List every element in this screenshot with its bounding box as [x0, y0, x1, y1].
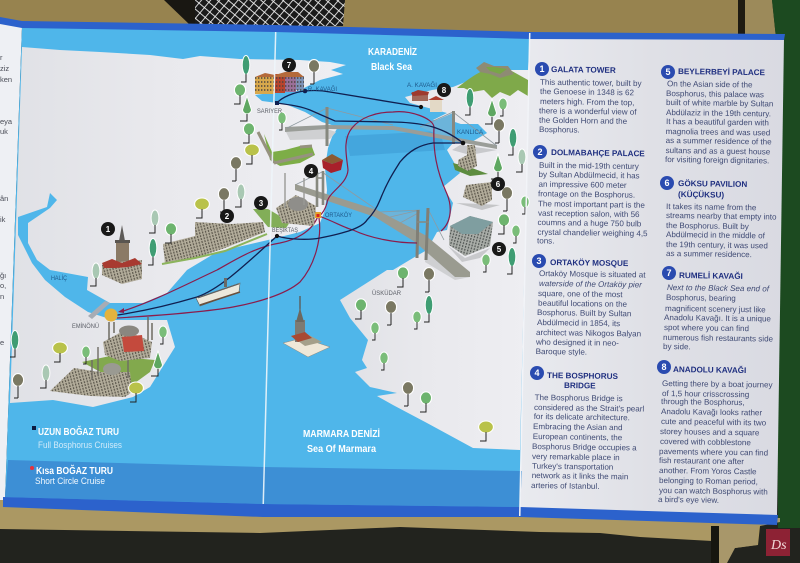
section 8: Anadolu Kavağı: Getting there by a boat journey — [662, 379, 773, 390]
trees: Asian side lower — [355, 267, 493, 441]
section 5: Beylerbeyi Palace: magnolia trees and was used — [666, 127, 770, 137]
tan strip beneath the map — [0, 495, 780, 550]
section 3: Ortaköy Mosque: ORTAKÖY MOSQUE — [550, 257, 629, 268]
Küçüksu Pavilion illustration — [456, 182, 500, 210]
trees: Asian side upper — [465, 88, 529, 274]
route stops — [275, 89, 465, 238]
place label Anadolu Kavağı: A. KAVAĞI — [407, 80, 437, 89]
legend: full cruise: UZUN BOĞAZ TURU — [38, 425, 119, 438]
map badge 5: 5 — [497, 245, 502, 254]
section 3: Ortaköy Mosque: architect was Nikogos Balyan — [536, 328, 641, 338]
Galata Bridge at Eminönü — [88, 301, 110, 319]
section 7: Rumeli Kavağı: RUMELİ KAVAĞI — [679, 269, 743, 281]
Eminönü marker — [104, 308, 118, 322]
section 1: Galata Tower: Bosphorus. — [539, 125, 580, 135]
place label Ortaköy: ORTAKÖY — [325, 211, 353, 219]
first bridge: Bosphorus Bridge — [295, 171, 470, 280]
section 2: Dolmabahçe Palace — [533, 145, 648, 246]
map badge 8 — [437, 83, 451, 97]
section 4: Bosphorus Bridge: for its delicate architecture. — [534, 412, 630, 422]
section 5: Beylerbeyi Palace — [661, 65, 773, 165]
section 8: Anadolu Kavağı: covered with cobblestone — [660, 437, 751, 447]
dark sea band at bottom — [5, 460, 522, 507]
section 7: Rumeli Kavağı: Next to the Black Sea end of — [667, 283, 770, 293]
section 5: Beylerbeyi Palace: as a summer residence of the — [666, 136, 772, 146]
place label Rumeli Kavağı: R. KAVAĞI — [308, 84, 337, 93]
section 1: Galata Tower: the Golden Horn and the — [539, 116, 628, 126]
dark shadow below net — [164, 0, 196, 25]
section 6: Göksu Pavilion: GÖKSU PAVILION — [678, 178, 747, 189]
section 4: Bosphorus Bridge: Turkey's transportation — [532, 462, 613, 472]
bottom blue stripe — [3, 497, 778, 525]
section 8: Anadolu Kavağı: fish restaurant one after — [659, 456, 744, 466]
section 8: Anadolu Kavağı: a bird's eye view. — [658, 495, 719, 505]
section 3: Ortaköy Mosque: who designed it in neo- — [535, 338, 619, 348]
sea label Sea of Marmara: Sea Of Marmara — [307, 443, 376, 455]
seat top surface — [0, 0, 740, 40]
section 5: Beylerbeyi Palace: Bosphorus, this palace was — [666, 89, 764, 99]
map badge 4: 4 — [309, 167, 314, 176]
left folded flap: ik — [0, 215, 6, 224]
section 8: Anadolu Kavağı: you can watch Bosphorus with — [659, 486, 768, 497]
place label Beşiktaş: BEŞİKTAŞ — [272, 225, 298, 234]
section 1: Galata Tower: the Genoese in 1348 is 62 — [540, 87, 635, 97]
map badge 7 — [282, 58, 296, 72]
left folded flap: n — [0, 292, 4, 301]
place label Eminönü: EMİNÖNÜ — [72, 321, 99, 330]
land: European side with Golden Horn — [10, 47, 346, 407]
section 6: Göksu Pavilion: (KÜÇÜKSU) — [678, 189, 724, 200]
map panel — [5, 26, 530, 509]
section 3: Ortaköy Mosque: Abdülmecid in 1854, its — [537, 318, 620, 328]
section 2: Dolmabahçe Palace: tons. — [537, 236, 555, 246]
Beylerbeyi Palace illustration — [448, 216, 493, 262]
legend: full cruise — [32, 425, 122, 451]
section 7: Rumeli Kavağı: spot where you can find — [664, 323, 749, 333]
section 1: Galata Tower: there is a wonderful view of — [539, 106, 637, 117]
legend: full cruise: Full Bosphorus Cruises — [38, 440, 122, 451]
section 3: Ortaköy Mosque: Bosphorus. Built by Sultan — [537, 308, 631, 318]
section 3: Ortaköy Mosque: square, one of the most — [538, 289, 623, 299]
map badge 2 — [220, 209, 234, 223]
section 7: Rumeli Kavağı: 7 — [666, 268, 672, 278]
full cruise routes (navy) — [111, 91, 463, 316]
section 1: Galata Tower: GALATA TOWER — [551, 65, 616, 75]
sea label Black Sea — [368, 45, 417, 73]
Yoros Castle hill illustration — [457, 62, 528, 98]
section 5: Beylerbeyi Palace: sultans and as a guest house — [666, 146, 771, 156]
watermark badge — [766, 529, 790, 556]
section 8: Anadolu Kavağı — [657, 360, 773, 505]
section 6: Göksu Pavilion: the 19th century, it was used — [666, 240, 768, 250]
Anadolu Hisarı tower illustration — [453, 145, 488, 176]
section 4: Bosphorus Bridge: Bosphorus Bridge occupies a — [532, 442, 637, 452]
section 3: Ortaköy Mosque: Baroque style. — [536, 347, 587, 357]
red pavilion illustration — [322, 154, 343, 173]
section 2: Dolmabahçe Palace: frontage on the Bosphorus. — [538, 189, 635, 200]
section 2: Dolmabahçe Palace: coumns and a huge 750 bulb — [537, 218, 642, 228]
section 8: Anadolu Kavağı: storey houses and a square — [660, 427, 760, 437]
section 2: Dolmabahçe Palace: The most important part is the — [538, 199, 646, 210]
Kanlıca inlet — [445, 124, 487, 138]
section 1: Galata Tower: meters high. From the top, — [540, 97, 634, 107]
left folded flap: r — [0, 53, 3, 62]
section 8: Anadolu Kavağı: cute and peaceful with its two — [661, 417, 767, 427]
sea label Black Sea: KARADENİZ — [368, 45, 417, 58]
place label Sarıyer: SARIYER — [257, 108, 282, 115]
land: Asian side — [340, 37, 530, 450]
Dolmabahçe Palace illustration — [162, 222, 267, 264]
left folded flap: ken — [0, 75, 12, 84]
sea label Black Sea: Black Sea — [371, 61, 412, 73]
section 8: Anadolu Kavağı: belonging to Roman period, — [659, 476, 758, 486]
Sarıyer houses illustration — [255, 72, 304, 94]
map badge 8: 8 — [442, 86, 447, 95]
map badge 5 — [492, 242, 506, 256]
section 2: Dolmabahçe Palace: crystal chandelier weighing 4,5 — [537, 228, 648, 238]
Blue Mosque complex illustration — [50, 347, 155, 397]
section 1: Galata Tower: 1 — [539, 64, 545, 74]
section 1: Galata Tower: This authentic tower, built by — [540, 78, 642, 88]
section 6: Göksu Pavilion: the Bosphorus. Built by — [666, 221, 749, 231]
section 2: Dolmabahçe Palace: Built in the mid-19th century — [539, 161, 639, 171]
section 5: Beylerbeyi Palace: BEYLERBEYİ PALACE — [678, 66, 766, 77]
Galata Tower illustration — [102, 225, 142, 284]
place label Kanlıca: KANLICA — [457, 129, 484, 136]
map badge 3 — [254, 196, 268, 210]
section 4: Bosphorus Bridge: BRIDGE — [564, 381, 596, 390]
legend: short cruise — [30, 464, 113, 487]
section 1: Galata Tower — [535, 62, 642, 135]
place label Üsküdar: ÜSKÜDAR — [372, 289, 401, 297]
section 8: Anadolu Kavağı: of 1,5 hour crisscrossing — [662, 389, 749, 399]
section 6: Göksu Pavilion: 6 — [664, 178, 670, 188]
section 5: Beylerbeyi Palace: built of white marble by Sultan — [666, 98, 773, 108]
map badge 4 — [304, 164, 318, 178]
section 6: Göksu Pavilion: Abdülmecid in the middle of — [666, 230, 766, 240]
section 8: Anadolu Kavağı: 8 — [661, 362, 667, 372]
section 2: Dolmabahçe Palace: DOLMABAHÇE PALACE — [551, 148, 645, 158]
section 8: Anadolu Kavağı: pavements where you can find — [659, 447, 768, 458]
section 3: Ortaköy Mosque: beautiful locations on the — [538, 299, 628, 309]
ferry illustration — [196, 278, 240, 306]
legend: short cruise: Short Circle Cruise — [35, 476, 105, 487]
map badge 3: 3 — [259, 199, 264, 208]
left folded flap: o, — [0, 281, 6, 290]
seat right section — [745, 0, 776, 38]
place label Haliç: HALİÇ — [51, 273, 67, 282]
map badge 1 — [101, 222, 115, 236]
section 5: Beylerbeyi Palace: It has a beautiful garden with — [666, 117, 769, 127]
Ortaköy Mosque illustration — [253, 173, 316, 228]
map badge 6: 6 — [496, 180, 501, 189]
Maiden's Tower illustration — [283, 296, 330, 357]
left folded flap: uk — [0, 127, 8, 136]
section 4: Bosphorus Bridge: Embracing the Asian and — [533, 422, 623, 432]
short cruise routes (red) — [117, 112, 450, 318]
section 7: Rumeli Kavağı: Anadolu Kavağı. It is a unique — [664, 313, 772, 323]
fold line left — [262, 30, 276, 504]
map badge 7: 7 — [287, 61, 292, 70]
section 4: Bosphorus Bridge: European continents, the — [533, 432, 623, 442]
section 3: Ortaköy Mosque — [532, 254, 646, 357]
fold line right — [519, 33, 530, 516]
darker strait band — [345, 131, 445, 156]
map badge 6 — [491, 177, 505, 191]
section 7: Rumeli Kavağı: by side. — [663, 342, 691, 351]
section 5: Beylerbeyi Palace: On the Asian side of the — [667, 79, 753, 90]
section 4: Bosphorus Bridge: THE BOSPHORUS — [547, 371, 619, 381]
seat lower right tan — [719, 525, 758, 563]
seat seam — [738, 0, 745, 36]
section 2: Dolmabahçe Palace: vast reception salon, with 56 — [538, 209, 640, 219]
section 4: Bosphorus Bridge: The Bosphorus Bridge is — [535, 393, 623, 403]
seat seam bottom — [711, 526, 719, 563]
section 4: Bosphorus Bridge — [530, 366, 645, 491]
sea label Sea of Marmara — [303, 427, 380, 455]
water — [5, 26, 530, 509]
Hagia Sophia illustration — [103, 317, 152, 361]
left folded flap: ân — [0, 194, 8, 203]
trees: European side upper — [230, 56, 320, 181]
white net — [195, 0, 345, 26]
Anadolu Kavağı houses illustration — [411, 90, 444, 112]
watermark badge: Ds — [770, 538, 787, 553]
section 7: Rumeli Kavağı: Bosphorus, bearing — [666, 293, 736, 303]
Rumeli Fortress illustration — [258, 132, 315, 166]
section 4: Bosphorus Bridge: network as it links the main — [532, 471, 628, 481]
section 8: Anadolu Kavağı: another. From Yoros Castle — [659, 466, 757, 476]
section 7: Rumeli Kavağı: magnificent scenery just like — [665, 304, 766, 314]
section 2: Dolmabahçe Palace: 2 — [537, 147, 543, 157]
section 6: Göksu Pavilion: as a summer residence. — [666, 249, 752, 259]
section 2: Dolmabahçe Palace: an impressive 600 meter — [538, 180, 627, 190]
grass at right edge — [772, 0, 800, 528]
section 2: Dolmabahçe Palace: by Sultan Abdülmecid, it has — [538, 170, 640, 180]
section 5: Beylerbeyi Palace: for visiting foreign dignitaries. — [665, 155, 769, 165]
section 3: Ortaköy Mosque: 3 — [536, 256, 542, 266]
top blue stripe — [0, 17, 785, 40]
left folded flap: ğı — [0, 271, 6, 280]
section 4: Bosphorus Bridge: considered as the Strait's pearl — [534, 403, 645, 414]
section 8: Anadolu Kavağı: Anadolu Kavağı looks rather — [661, 407, 763, 417]
sea label Sea of Marmara: MARMARA DENİZİ — [303, 427, 380, 440]
section 8: Anadolu Kavağı: ANADOLU KAVAĞI — [673, 363, 746, 375]
second bridge: Fatih Sultan Mehmet — [285, 107, 497, 155]
left folded flap: e — [0, 338, 4, 347]
legend: short cruise: Kısa BOĞAZ TURU — [36, 464, 113, 477]
section 4: Bosphorus Bridge: arteries of Istanbul. — [531, 481, 600, 491]
panel: attraction descriptions — [530, 62, 777, 505]
section 7: Rumeli Kavağı: numerous fish restaurants side — [663, 333, 774, 344]
right text panel paper — [520, 37, 784, 516]
section 7: Rumeli Kavağı — [662, 266, 774, 351]
section 6: Göksu Pavilion — [660, 176, 777, 259]
section 3: Ortaköy Mosque: Ortaköy Mosque is situated at — [539, 269, 646, 279]
trees: European side lower — [10, 184, 245, 402]
left folded flap — [0, 22, 22, 500]
map badge 1: 1 — [106, 225, 111, 234]
section 4: Bosphorus Bridge: very remarkable place in — [532, 452, 620, 462]
left folded flap: ziz — [0, 64, 9, 73]
section 8: Anadolu Kavağı: through the Bosphorus, — [661, 397, 745, 407]
section 5: Beylerbeyi Palace: 5 — [665, 67, 671, 77]
section 6: Göksu Pavilion: It takes its name from the — [666, 202, 757, 212]
section 3: Ortaköy Mosque: waterside of the Ortaköy pier — [539, 279, 642, 289]
left folded flap: eya — [0, 117, 13, 126]
map badge 2: 2 — [225, 212, 230, 221]
section 5: Beylerbeyi Palace: Abdülaziz in the 19th century. — [666, 108, 771, 118]
section 4: Bosphorus Bridge: 4 — [534, 368, 540, 378]
section 6: Göksu Pavilion: streams nearby that empty into — [666, 211, 777, 222]
